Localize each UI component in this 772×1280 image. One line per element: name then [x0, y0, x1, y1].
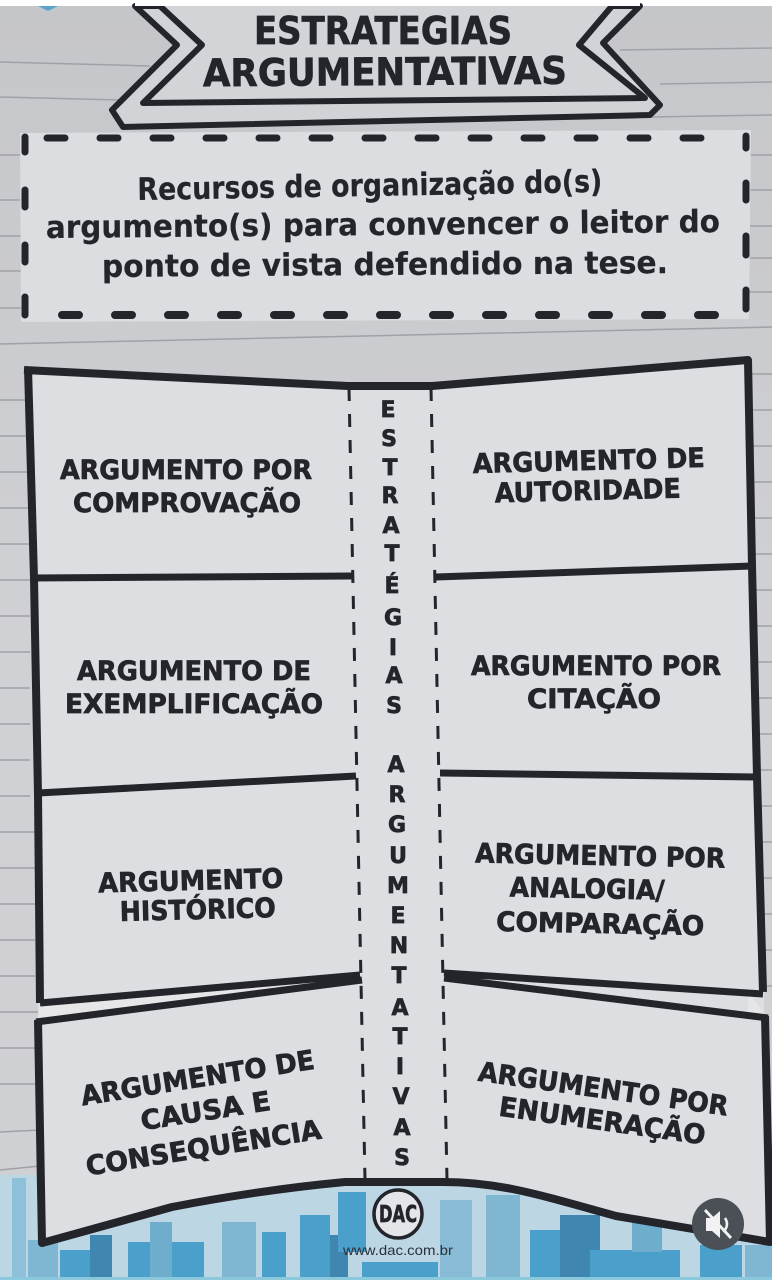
vertical text: ESTRATÉGIAS ARGUMENTATIVAS: A	[385, 664, 403, 689]
vertical text: ESTRATÉGIAS ARGUMENTATIVAS	[380, 398, 411, 1171]
vertical text: ESTRATÉGIAS ARGUMENTATIVAS: T	[392, 1025, 408, 1050]
label: argumento de causa e consequência: ARGUMENTO DE	[79, 1045, 317, 1112]
vertical text: ESTRATÉGIAS ARGUMENTATIVAS: U	[389, 844, 407, 869]
vertical text: ESTRATÉGIAS ARGUMENTATIVAS: A	[387, 753, 405, 778]
label: argumento por analogia/comparação: ARGUMENTO POR	[475, 838, 726, 875]
vertical text: ESTRATÉGIAS ARGUMENTATIVAS: A	[393, 1116, 411, 1141]
label: argumento histórico: ARGUMENTO	[98, 864, 284, 899]
label: argumento por citação: CITAÇÃO	[527, 683, 661, 715]
vertical text: ESTRATÉGIAS ARGUMENTATIVAS: T	[391, 964, 407, 989]
label: argumento por analogia/comparação: ANALOGIA/	[509, 872, 665, 907]
label: argumento de exemplificação: EXEMPLIFICAÇÃO	[65, 688, 323, 720]
icon: muted speaker button	[692, 1198, 744, 1250]
website url: www.dac.com.br	[342, 1242, 453, 1258]
label: argumento por analogia/comparação: COMPARAÇÃO	[496, 906, 705, 942]
definition text: Recursos de organização do(s)	[137, 164, 603, 208]
vertical text: ESTRATÉGIAS ARGUMENTATIVAS: É	[384, 573, 400, 599]
definition text: ponto de vista defendido na tese.	[102, 245, 668, 285]
label: argumento por citação	[471, 651, 721, 715]
label: argumento por enumeração: ENUMERAÇÃO	[497, 1091, 707, 1151]
definition box	[20, 130, 751, 322]
vertical text: ESTRATÉGIAS ARGUMENTATIVAS: A	[391, 996, 409, 1021]
label: argumento por enumeração: ARGUMENTO POR	[476, 1057, 730, 1122]
vertical text: ESTRATÉGIAS ARGUMENTATIVAS: S	[386, 694, 402, 719]
label: argumento de autoridade: ARGUMENTO DE	[472, 443, 705, 480]
label: argumento de causa e consequência: CONSEQUÊNCIA	[84, 1114, 324, 1183]
title banner	[112, 3, 660, 127]
vertical text: ESTRATÉGIAS ARGUMENTATIVAS: I	[396, 1055, 404, 1080]
label: argumento por comprovação	[60, 455, 312, 519]
label: argumento de exemplificação: ARGUMENTO DE	[77, 656, 311, 687]
label: argumento por comprovação: COMPROVAÇÃO	[73, 487, 301, 519]
vertical text: ESTRATÉGIAS ARGUMENTATIVAS: M	[387, 874, 409, 899]
label: argumento por enumeração	[476, 1057, 730, 1151]
title text: ARGUMENTATIVAS	[203, 49, 567, 95]
label: argumento de autoridade	[472, 443, 705, 509]
label: argumento de causa e consequência	[79, 1045, 324, 1183]
definition text: argumento(s) para convencer o leitor do	[46, 204, 720, 246]
title text: ESTRATEGIAS	[254, 9, 512, 53]
vertical text: ESTRATÉGIAS ARGUMENTATIVAS: G	[384, 606, 402, 631]
vertical text: ESTRATÉGIAS ARGUMENTATIVAS: T	[382, 456, 398, 481]
definition text	[46, 164, 720, 285]
vertical text: ESTRATÉGIAS ARGUMENTATIVAS: V	[392, 1085, 410, 1110]
central column	[349, 388, 447, 1180]
vertical text: ESTRATÉGIAS ARGUMENTATIVAS: E	[380, 398, 396, 423]
panel: folded card	[24, 360, 770, 1243]
outline strokes	[24, 360, 770, 1243]
vertical text: ESTRATÉGIAS ARGUMENTATIVAS: N	[390, 934, 408, 959]
vertical text: ESTRATÉGIAS ARGUMENTATIVAS: E	[390, 904, 406, 929]
title text	[203, 9, 567, 95]
logo: DAC	[374, 1190, 422, 1238]
vertical text: ESTRATÉGIAS ARGUMENTATIVAS: G	[388, 813, 406, 838]
logo: DAC: DAC	[379, 1202, 417, 1228]
vertical text: ESTRATÉGIAS ARGUMENTATIVAS: S	[394, 1146, 410, 1171]
vertical text: ESTRATÉGIAS ARGUMENTATIVAS: A	[382, 514, 400, 539]
vertical text: ESTRATÉGIAS ARGUMENTATIVAS: I	[389, 636, 397, 661]
footer skyline background	[0, 1175, 772, 1280]
label: argumento por citação: ARGUMENTO POR	[471, 651, 721, 682]
vertical text: ESTRATÉGIAS ARGUMENTATIVAS: R	[382, 484, 399, 509]
label: argumento de autoridade: AUTORIDADE	[494, 474, 681, 509]
vertical text: ESTRATÉGIAS ARGUMENTATIVAS: T	[384, 542, 400, 567]
label: argumento histórico: HISTÓRICO	[119, 892, 276, 928]
label: argumento histórico	[98, 864, 284, 928]
label: argumento por comprovação: ARGUMENTO POR	[60, 455, 312, 486]
label: argumento de exemplificação	[65, 656, 323, 720]
vertical text: ESTRATÉGIAS ARGUMENTATIVAS: R	[389, 783, 406, 808]
vertical text: ESTRATÉGIAS ARGUMENTATIVAS: S	[381, 427, 397, 452]
label: argumento de causa e consequência: CAUSA E	[139, 1086, 273, 1137]
label: argumento por analogia/comparação	[475, 838, 726, 942]
